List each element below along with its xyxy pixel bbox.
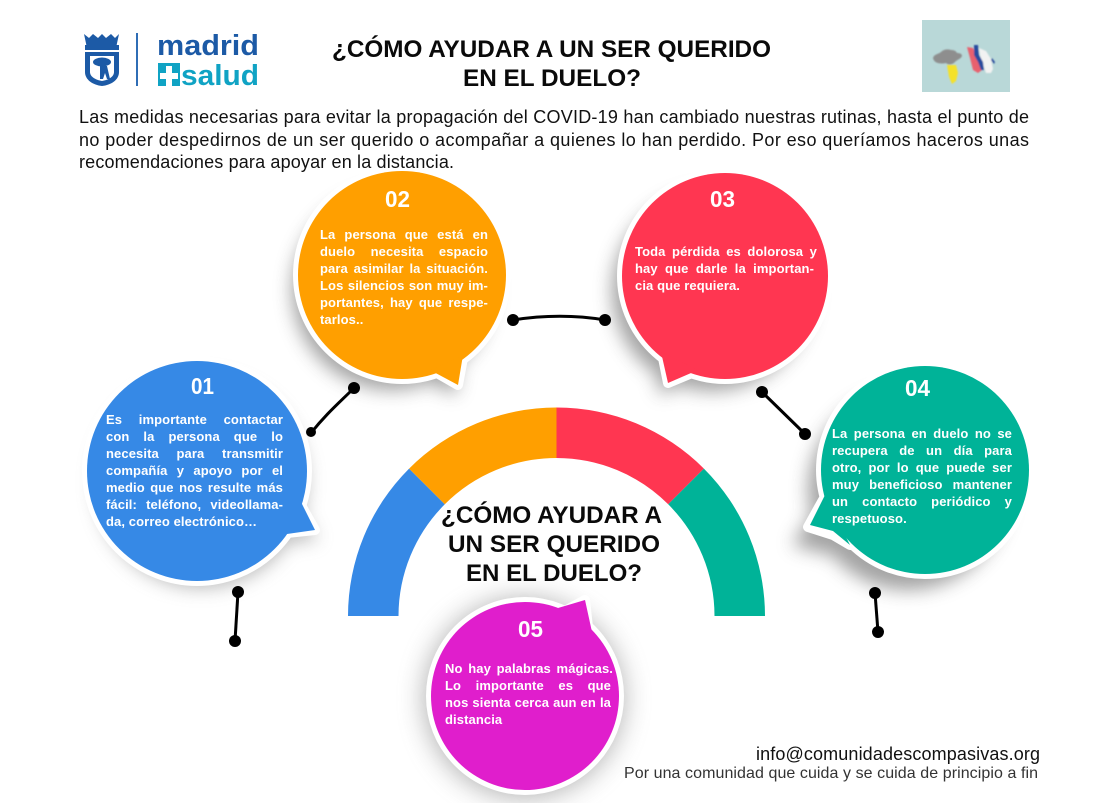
text 05: distancia [445, 712, 502, 727]
text 02: tarlos.. [320, 312, 363, 327]
text 04: respetuoso. [832, 511, 907, 526]
text 01: fácil: teléfono, videollama- [106, 497, 283, 512]
text 03: Toda pérdida es dolorosa y [635, 244, 817, 259]
icon: plus box [158, 63, 180, 86]
bubble 01 [87, 361, 318, 588]
centre heading: UN SER QUERIDO [448, 531, 660, 558]
text 01: medio que nos resulte más [106, 480, 283, 495]
number 04: 04 [905, 375, 930, 401]
text 04: otro, por lo que puede ser [832, 460, 1012, 475]
title: ¿CÓMO AYUDAR A UN SER QUERIDO [332, 35, 771, 63]
centre heading [441, 501, 662, 587]
number 03: 03 [710, 186, 735, 212]
bubble 04 [792, 366, 1029, 590]
text 01: compañía y apoyo por el [106, 463, 283, 478]
icon: Madrid coat of arms [84, 34, 119, 86]
number 01: 01 [191, 373, 214, 399]
text 03: cia que requiera. [635, 278, 740, 293]
centre heading: ¿CÓMO AYUDAR A [441, 501, 662, 529]
number 05: 05 [518, 616, 543, 642]
text 01: Es importante contactar [106, 412, 283, 427]
text 05: No hay palabras mágicas. [445, 661, 613, 676]
footer contact: Por una comunidad que cuida y se cuida de principio a fin [624, 765, 1038, 782]
connector: below 01 [229, 586, 244, 647]
intro paragraph: Las medidas necesarias para evitar la propagación del COVID-19 han cambiado nuestras rutinas, hasta el punto de [79, 107, 1029, 127]
text 02: Los silencios son muy im- [320, 278, 488, 293]
text 04: recupera de un día para [832, 443, 1012, 458]
text 02: duelo necesita espacio [320, 244, 488, 259]
bubble 02 [292, 171, 506, 395]
text 01: con la persona que lo [106, 429, 283, 444]
text 02: para asimilar la situación. [320, 261, 488, 276]
intro paragraph: no poder despedirnos de un ser querido o acompañar a quienes lo han perdido. Por eso queríamos haceros unas [79, 130, 1029, 150]
text 03 [635, 243, 817, 294]
title [332, 35, 771, 92]
text 04 [832, 425, 1012, 527]
wordmark: madrid: madrid [157, 30, 259, 62]
footer contact: info@comunidadescompasivas.org [756, 744, 1040, 764]
text 01: da, correo electrónico… [106, 514, 257, 529]
intro paragraph: recomendaciones para apoyar en la distancia. [79, 152, 454, 172]
text 01: necesita para transmitir [106, 446, 283, 461]
text 02 [320, 226, 488, 328]
text 04: muy beneficioso mantener [832, 477, 1012, 492]
footer contact [624, 744, 1040, 782]
bubble 05 [424, 598, 624, 798]
text 03: hay que darle la importan- [635, 261, 814, 276]
illustration thumbnail [922, 20, 1010, 92]
title: EN EL DUELO? [463, 65, 641, 92]
centre heading: EN EL DUELO? [466, 560, 642, 587]
text 02: portantes, hay que respe- [320, 295, 488, 310]
connector: below 04 [869, 587, 884, 638]
connector: 02 to 03 [507, 314, 611, 326]
text 04: La persona en duelo no se [832, 426, 1012, 441]
text 04: un contacto periódico y [832, 494, 1012, 509]
bubble 03 [612, 173, 828, 395]
text 02: La persona que está en [320, 227, 488, 242]
logo: Madrid Salud [84, 30, 259, 92]
connector: 01 to 02 [306, 382, 360, 437]
wordmark: salud: salud [181, 60, 259, 92]
text 05 [445, 660, 613, 728]
text 01 [106, 411, 283, 530]
intro paragraph [79, 107, 1029, 172]
semicircle chart: four coloured segments [348, 408, 765, 616]
number 02: 02 [385, 186, 410, 212]
text 05: nos sienta cerca aun en la [445, 695, 611, 710]
connector: 03 to 04 [756, 386, 811, 440]
text 05: Lo importante es que [445, 678, 611, 693]
